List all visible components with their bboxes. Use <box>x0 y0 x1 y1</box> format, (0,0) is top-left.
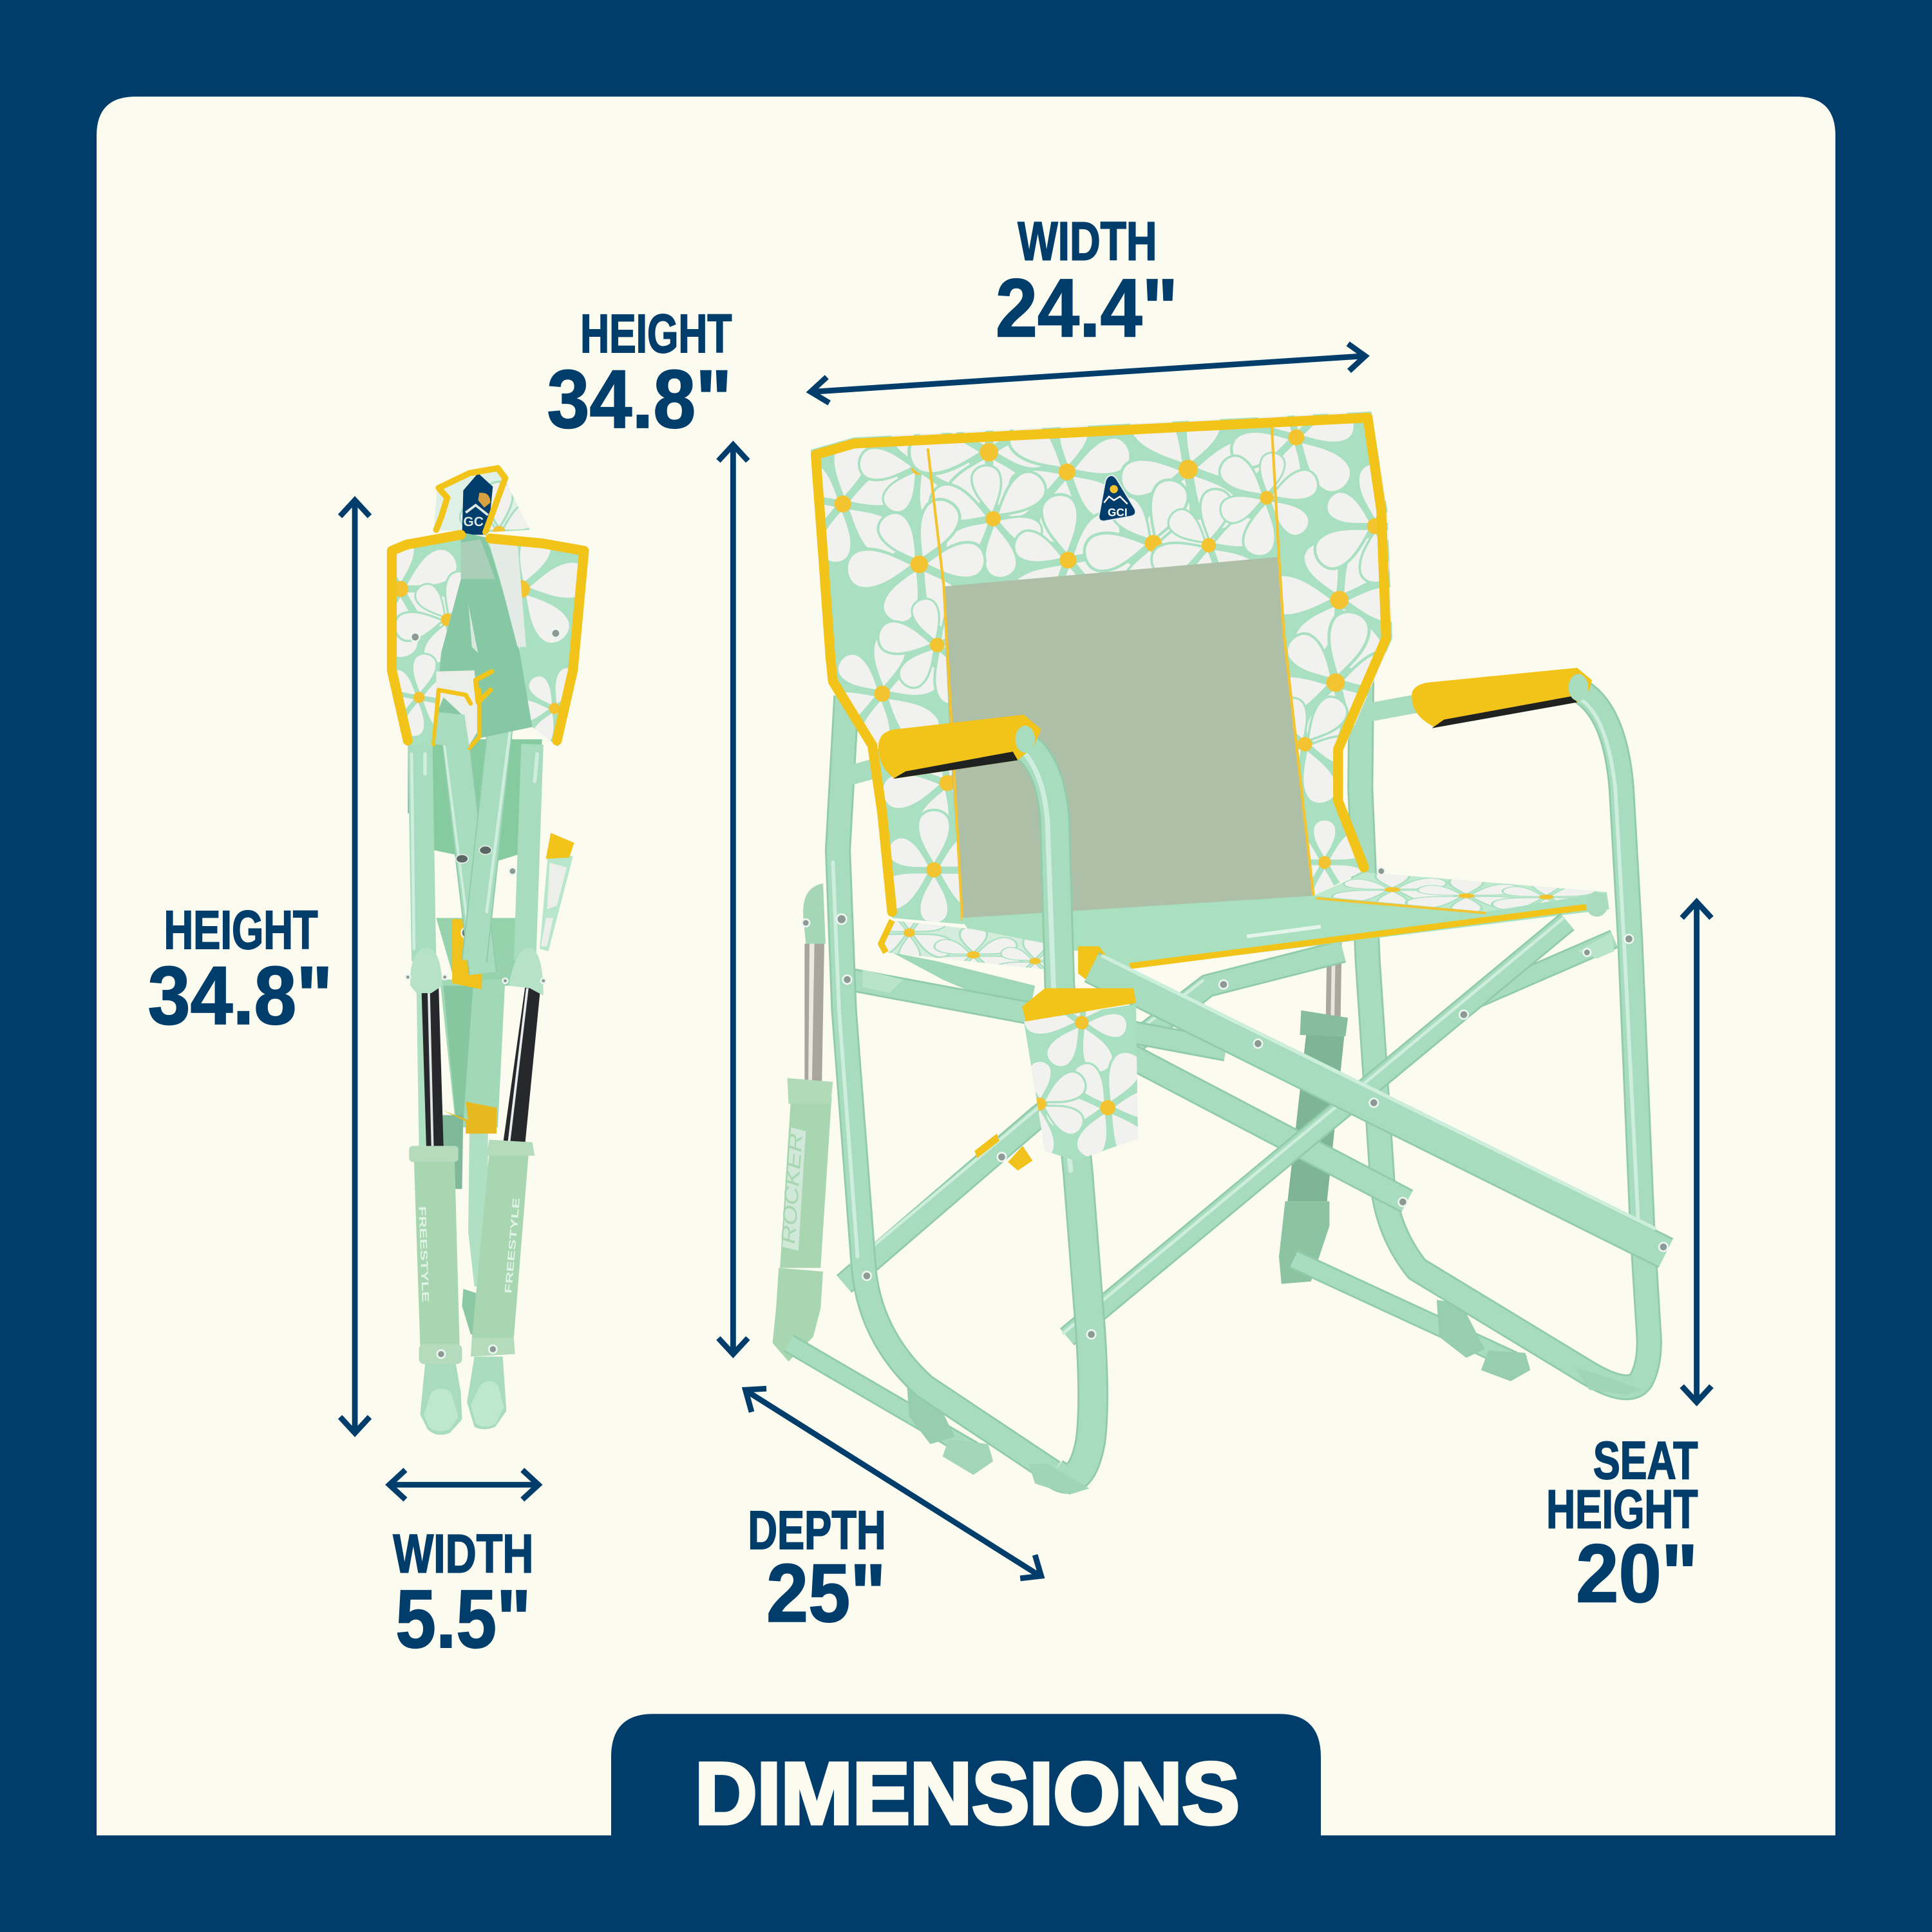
label: open height: HEIGHT <box>580 303 732 364</box>
folded: inner arm pads <box>433 670 491 748</box>
screws <box>802 867 1668 1339</box>
left cylinder, rod and foot bar: ROCKER <box>777 1133 807 1245</box>
folded: chrome rods <box>421 980 541 1148</box>
folded: lower cylinders: FREESTYLE <box>417 1206 431 1302</box>
folded: rear mass, webbing and center strut <box>408 739 542 1334</box>
folded: collar at chair top: GC <box>463 515 484 529</box>
label: depth: DEPTH <box>748 1500 886 1560</box>
label: seat height: HEIGHT <box>1546 1479 1698 1539</box>
dimensions tab heading <box>611 1714 1321 1842</box>
arrow: open height <box>718 445 748 1354</box>
left side rear frame <box>803 696 1054 1472</box>
folded: feet <box>420 1357 506 1435</box>
chair seat <box>863 871 1609 984</box>
right side cylinder, rod and foot bar <box>1279 943 1530 1381</box>
GCI logo badge <box>1099 475 1135 521</box>
label: folded height: HEIGHT <box>164 900 318 960</box>
front arm and leg tube <box>1013 739 1093 1495</box>
big front cross brace <box>1063 918 1666 1337</box>
folded chair <box>386 465 589 1435</box>
arrow: seat height <box>1682 902 1712 1402</box>
label: open width <box>996 211 1178 354</box>
label: depth: 25" <box>766 1548 886 1640</box>
folded: lower cylinders: FREESTYLE <box>503 1197 522 1294</box>
left cylinder, rod and foot bar <box>773 944 993 1475</box>
yellow binding <box>816 418 1386 912</box>
label: seat height: SEAT <box>1593 1432 1698 1490</box>
arm pads <box>878 668 1592 779</box>
folded: cup holder <box>540 833 574 951</box>
right side rocker frame <box>1360 665 1649 1395</box>
label: folded height <box>148 900 333 1042</box>
label: folded height: 34.8" <box>148 950 333 1042</box>
label: open height <box>547 303 732 446</box>
arrow: folded height <box>340 500 370 1433</box>
folded: center interior <box>433 533 533 739</box>
folded: yellow tag top and bottom <box>442 919 497 1133</box>
folded: lower cylinders <box>409 1140 535 1364</box>
folded: collar at chair top <box>433 465 529 536</box>
arrow: open width <box>811 344 1365 403</box>
label: folded width: 5.5" <box>395 1573 531 1665</box>
folded: frame tubes <box>405 670 546 996</box>
cup holder <box>1022 988 1138 1159</box>
arrow: folded width <box>390 1470 538 1499</box>
dimensions tab heading: DIMENSIONS <box>695 1745 1240 1842</box>
label: depth <box>748 1500 886 1640</box>
mesh panel <box>943 557 1314 920</box>
rear cross braces <box>844 933 1614 1284</box>
GCI logo badge: GCI <box>1108 506 1128 519</box>
yellow piping <box>928 424 1314 920</box>
label: open height: 34.8" <box>547 354 732 446</box>
mesh chair back <box>810 412 1392 924</box>
label: open width: 24.4" <box>996 262 1178 354</box>
label: open width: WIDTH <box>1018 211 1157 272</box>
label: seat height: 20" <box>1576 1528 1698 1620</box>
folded: fabric flaps <box>386 529 589 747</box>
label: folded width <box>393 1523 533 1665</box>
label: seat height <box>1546 1432 1698 1620</box>
open chair <box>764 357 1668 1495</box>
label: folded width: WIDTH <box>393 1523 533 1584</box>
arrow: depth <box>746 1388 1041 1578</box>
